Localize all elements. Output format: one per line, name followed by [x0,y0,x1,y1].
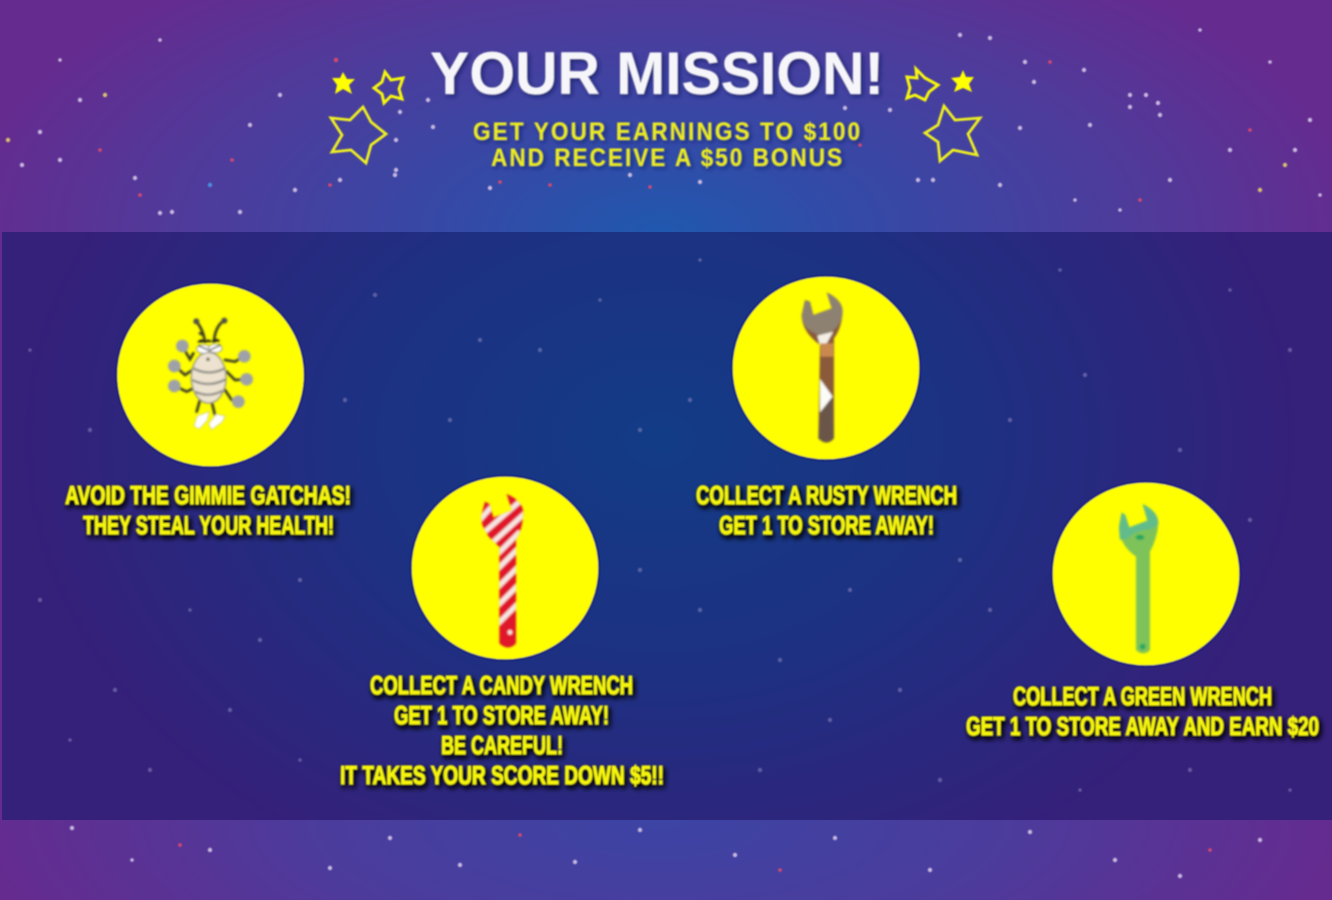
caption: avoid gimmie gatchas: THEY STEAL YOUR HEALTH! [83,510,334,540]
icon circle: candy wrench [411,476,599,660]
item: candy wrench [340,476,664,790]
icon: rusty wrench [802,292,843,442]
caption: avoid gimmie gatchas: AVOID THE GIMMIE GATCHAS! [65,480,351,510]
icon: gimmie gatcha bug [168,318,253,430]
item: gimmie gatcha [65,283,351,540]
caption: candy wrench: IT TAKES YOUR SCORE DOWN $5!! [340,760,664,790]
icon circle: bug [116,283,304,467]
caption: candy wrench: BE CAREFUL! [441,730,563,760]
icon: green wrench [1119,504,1158,653]
icon: large outline star right [925,106,980,161]
icon: solid star left [332,72,355,94]
title: YOUR MISSION! [430,40,884,107]
subtitle [473,118,860,172]
item: green wrench [966,482,1319,741]
caption: green wrench [966,681,1319,741]
icons: decorative stars right [907,69,980,161]
icon: candy wrench [478,494,527,647]
icon: large outline star left [331,107,386,163]
icon circle: rusty wrench [732,276,920,460]
item: rusty wrench [696,276,957,540]
icons: decorative stars left [331,72,403,163]
icon: small outline star right [907,69,938,100]
star field: main panel [28,258,1292,792]
background: footer band [0,820,1332,900]
icon: small outline star left [374,72,403,103]
caption: candy wrench: COLLECT A CANDY WRENCH [370,670,633,700]
background: header band [0,0,1332,232]
caption: rusty wrench [696,480,957,540]
icon: solid star right [951,70,974,92]
caption: rusty wrench: GET 1 TO STORE AWAY! [719,510,934,540]
caption: rusty wrench: COLLECT A RUSTY WRENCH [696,480,957,510]
subtitle: AND RECEIVE A $50 BONUS [491,144,842,172]
caption: avoid gimmie gatchas [65,480,351,540]
caption: candy wrench: GET 1 TO STORE AWAY! [394,700,609,730]
subtitle: GET YOUR EARNINGS TO $100 [473,118,860,146]
caption: candy wrench [340,670,664,790]
icon circle: green wrench [1052,482,1240,666]
panel: main mission area [2,232,1332,820]
